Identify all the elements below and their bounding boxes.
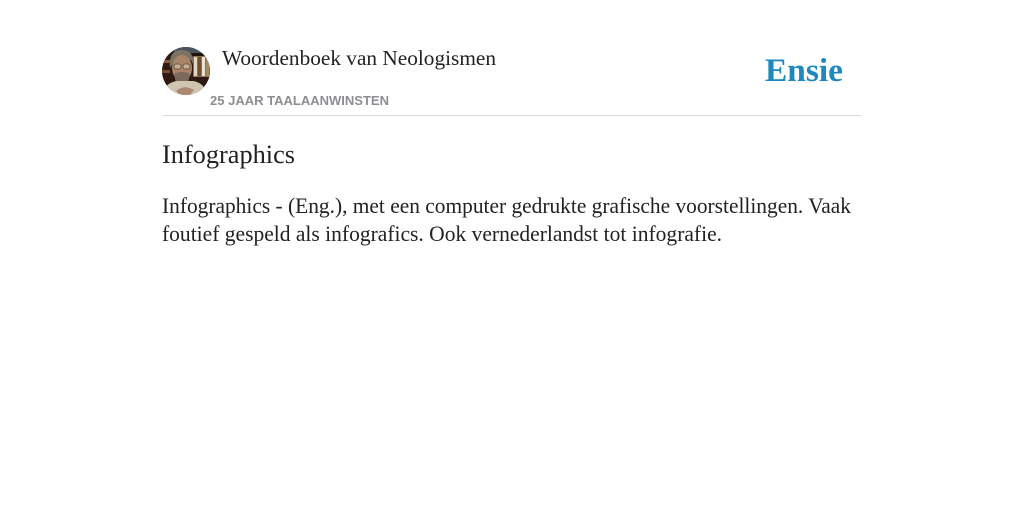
- subtitle: 25 JAAR TAALAANWINSTEN: [210, 93, 389, 108]
- heading: Infographics: [162, 140, 295, 169]
- author name: Woordenboek van Neologismen: [222, 46, 497, 70]
- definition text: Infographics - (Eng.), met een computer gedrukte grafische voorstellingen. Vaak: [162, 193, 851, 218]
- icon: author avatar: [162, 47, 210, 95]
- logo: Ensie: Ensie: [765, 53, 843, 89]
- definition text: [162, 193, 851, 246]
- definition text: foutief gespeld als infografics. Ook vernederlandst tot infografie.: [162, 221, 722, 246]
